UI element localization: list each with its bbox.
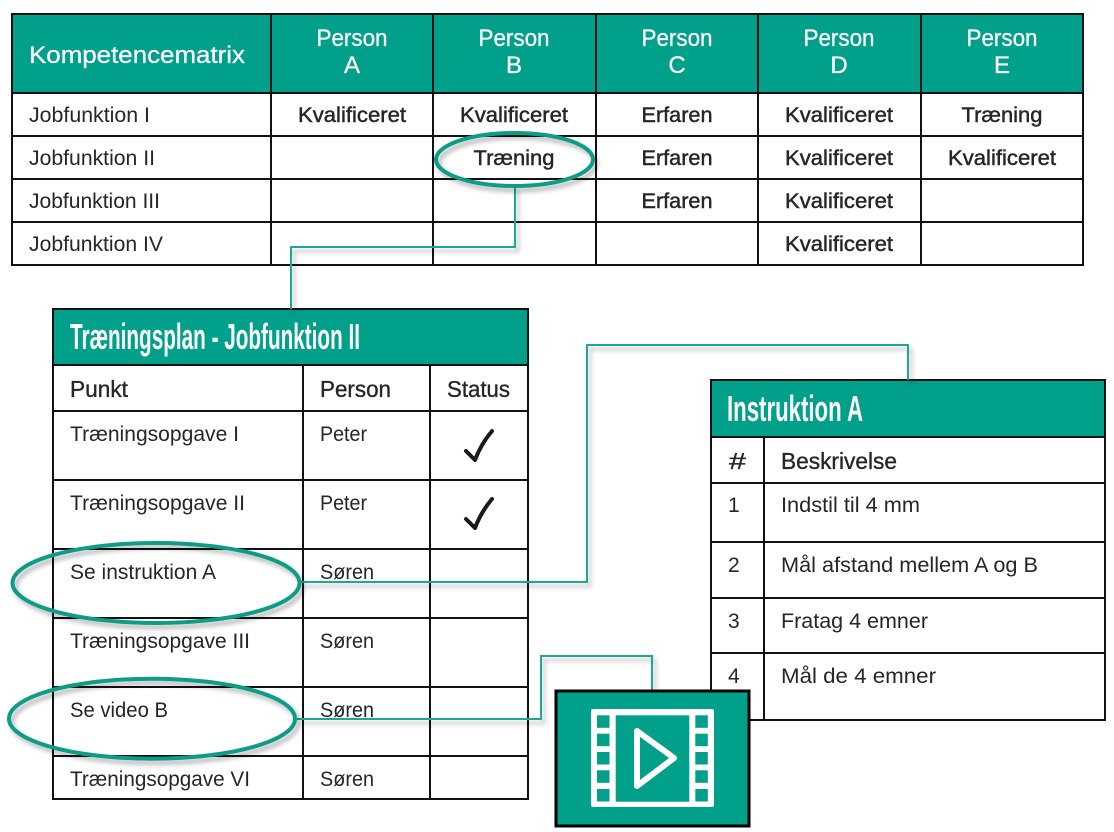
instruction numbers: 3 [728,610,740,633]
heading: Træningsplan: Træningsplan - Jobfunktion II [70,316,360,357]
training plan column headers: Status [447,376,510,402]
training plan tasks: Se video B [70,699,168,722]
video box background [556,691,749,826]
column headers: persons: Person [642,25,712,52]
panel: competence matrix table [12,14,1083,265]
matrix cell values: Kvalificeret [785,147,893,170]
training plan tasks: Træningsopgave II [70,492,245,515]
highlight oval: Se instruktion A [12,543,300,623]
icon: check mark 2 [466,499,492,528]
instruction background [711,380,1105,720]
training plan tasks: Træningsopgave I [70,423,239,446]
instruction numbers: 2 [728,554,740,577]
column headers: persons: Person [966,25,1038,52]
column headers: persons: Person [804,25,874,52]
matrix cell values: Træning [962,104,1042,127]
panel: video icon box [556,691,749,826]
connector: instruction row to instruction A [301,345,908,582]
highlight oval: Se video B [9,679,295,759]
icon: check mark 1 [466,431,492,460]
column headers: persons: E [994,52,1010,79]
row labels: job functions: Jobfunktion III [29,190,160,213]
matrix header band [12,14,1083,93]
instruction numbers: 1 [728,494,740,517]
row labels: job functions: Jobfunktion I [29,104,150,127]
matrix cell values: Kvalificeret [785,233,893,256]
row labels: job functions: Jobfunktion II [29,147,155,170]
column headers: persons: A [344,52,360,79]
training plan grid [53,309,528,799]
training plan tasks: Træningsopgave VI [70,768,250,791]
matrix cell values: Kvalificeret [785,190,893,213]
heading: Instruktion A: Instruktion A [727,388,863,429]
column headers: persons: C [668,52,686,79]
instruction descriptions: Mål de 4 emner [781,665,936,688]
instruction descriptions: Indstil til 4 mm [781,494,920,517]
column headers: persons [316,25,1038,79]
matrix cell values: Kvalificeret [298,104,406,127]
matrix cell values: Erfaren [642,104,712,127]
icon: film strip with play button [591,709,714,807]
instruction numbers: 4 [728,665,740,688]
training plan persons: Søren [320,630,374,653]
matrix cell values: Kvalificeret [948,147,1056,170]
training plan column headers: Person [320,376,391,402]
column headers: persons: D [830,52,848,79]
training plan tasks: Se instruktion A [70,561,216,584]
column headers: persons: Person [316,25,388,52]
training plan column headers [70,376,510,402]
training plan persons: Søren [320,699,374,722]
matrix grid [12,14,1083,265]
matrix cell values: Erfaren [642,190,712,213]
instruction grid [711,380,1105,720]
instruction column headers: Beskrivelse [781,448,897,474]
matrix cell values [298,104,1056,256]
column headers: persons: Person [478,25,550,52]
matrix cell values: Kvalificeret [460,104,568,127]
instruction descriptions: Fratag 4 emner [781,610,928,633]
panel: instruction A table [711,380,1105,720]
training plan tasks [70,423,250,791]
instruction header band [711,380,1105,437]
training plan persons [320,423,374,791]
training plan persons: Søren [320,561,374,584]
training plan persons: Peter [320,492,367,515]
matrix cell values: Erfaren [642,147,712,170]
instruction column headers [729,448,897,474]
training plan header band [53,309,528,365]
training plan persons: Søren [320,768,374,791]
matrix cell values: Kvalificeret [785,104,893,127]
instruction column headers: # [729,448,746,474]
training plan tasks: Træningsopgave III [70,630,250,653]
instruction numbers [728,494,740,688]
training plan column headers: Punkt [70,376,129,402]
instruction descriptions [781,494,1038,688]
connector: video row to video icon [297,656,652,719]
row labels: job functions: Jobfunktion IV [29,233,163,256]
connector: matrix to training plan [291,186,515,309]
matrix cell values: Træning [474,147,554,170]
training plan background [53,309,528,799]
heading: Kompetencematrix: Kompetencematrix [29,42,245,69]
highlight oval: Træning cell [436,133,593,186]
training plan persons: Peter [320,423,367,446]
panel: training plan table [53,309,528,799]
instruction descriptions: Mål afstand mellem A og B [781,554,1038,577]
row labels: job functions [29,104,163,256]
column headers: persons: B [506,52,522,79]
